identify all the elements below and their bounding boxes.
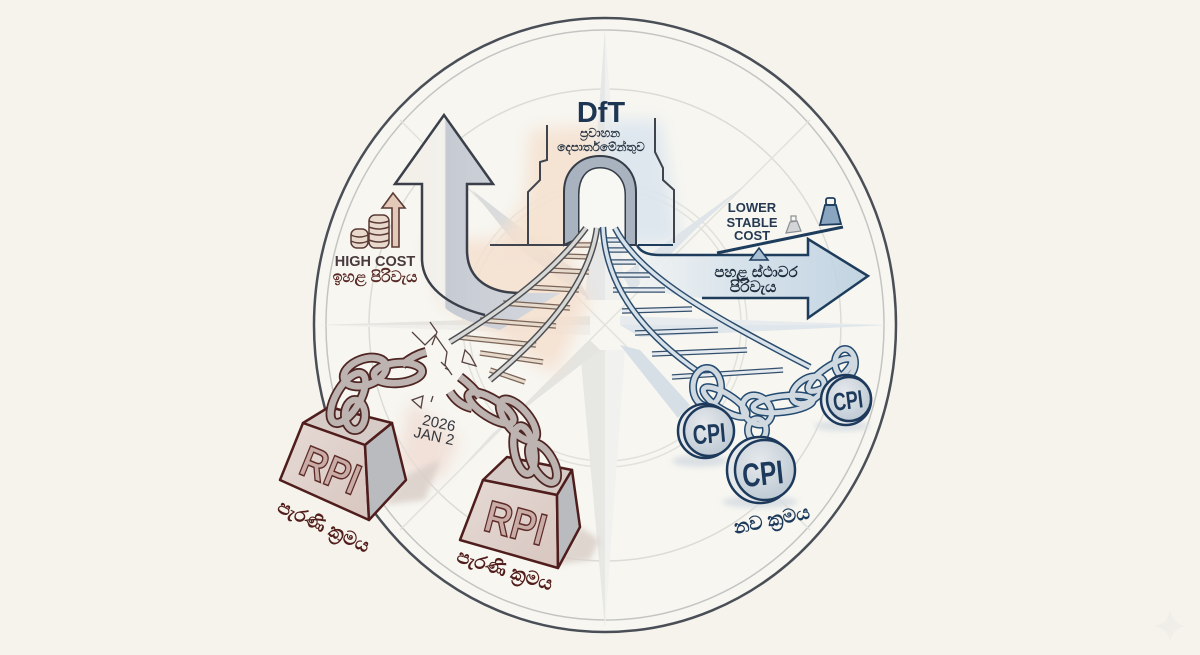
weight: RPI right: RPI bbox=[479, 491, 552, 555]
label: lower stable cost: STABLE bbox=[726, 215, 778, 230]
weight: CPI left: CPI bbox=[692, 419, 727, 451]
compass circle bbox=[314, 18, 896, 632]
weight: CPI right bbox=[821, 375, 871, 425]
arrow: high cost upward U-turn bbox=[395, 115, 560, 330]
cracks and break bbox=[412, 322, 476, 408]
tunnel building: DfT portal bbox=[490, 118, 674, 245]
label: lower stable cost: COST bbox=[734, 228, 770, 243]
compass star bbox=[318, 28, 888, 628]
weight: RPI left bbox=[280, 407, 406, 520]
label: lower stable cost: LOWER bbox=[728, 200, 777, 215]
label: high cost bbox=[333, 254, 418, 288]
label: date: 2026 bbox=[421, 412, 457, 435]
label: new method: නව ක්‍රමය bbox=[731, 502, 812, 540]
weight: RPI right bbox=[460, 457, 580, 568]
icon: corner sparkle bbox=[1154, 610, 1186, 642]
scale: lower stable cost balance bbox=[717, 198, 843, 260]
weight: CPI right: CPI bbox=[831, 384, 865, 417]
colour washes bbox=[395, 120, 680, 480]
chain: right RPI chain bbox=[450, 377, 563, 487]
label: date: JAN 2 bbox=[412, 424, 456, 449]
railway: left track bbox=[450, 228, 597, 382]
weight: RPI left: RPI bbox=[293, 436, 367, 505]
label: lower stable cost: පිරිවැය bbox=[729, 277, 777, 296]
chain: left RPI chain bbox=[324, 352, 426, 430]
label: lower stable cost: පහළ ස්ථාවර bbox=[714, 263, 799, 282]
weight: CPI left bbox=[678, 404, 734, 458]
label: high cost: HIGH COST bbox=[335, 254, 415, 270]
weight shadows bbox=[385, 460, 600, 565]
label: old method right: පැරණි ක්‍රමය bbox=[454, 546, 555, 597]
label: old method left: පැරණි ක්‍රමය bbox=[273, 496, 373, 559]
label: DfT: දෙපාර්තමේන්තුව bbox=[557, 140, 645, 155]
label: DfT: DfT bbox=[577, 97, 625, 129]
chain: CPI chain bbox=[693, 349, 856, 441]
weight: CPI centre bbox=[727, 437, 795, 503]
weight: CPI centre: CPI bbox=[741, 455, 785, 495]
label: high cost: ඉහළ පිරිවැය bbox=[333, 267, 418, 288]
icon: coins and small up arrow bbox=[351, 193, 405, 248]
label: DfT bbox=[557, 97, 645, 155]
label: date bbox=[412, 412, 457, 449]
railway: right track bbox=[603, 227, 810, 377]
label: lower stable cost bbox=[714, 200, 799, 296]
CPI shadows bbox=[672, 421, 870, 508]
label: DfT: ප්‍රවාහන bbox=[580, 126, 620, 142]
tunnel arch bbox=[564, 156, 636, 245]
arrow: lower stable cost bbox=[637, 239, 868, 318]
